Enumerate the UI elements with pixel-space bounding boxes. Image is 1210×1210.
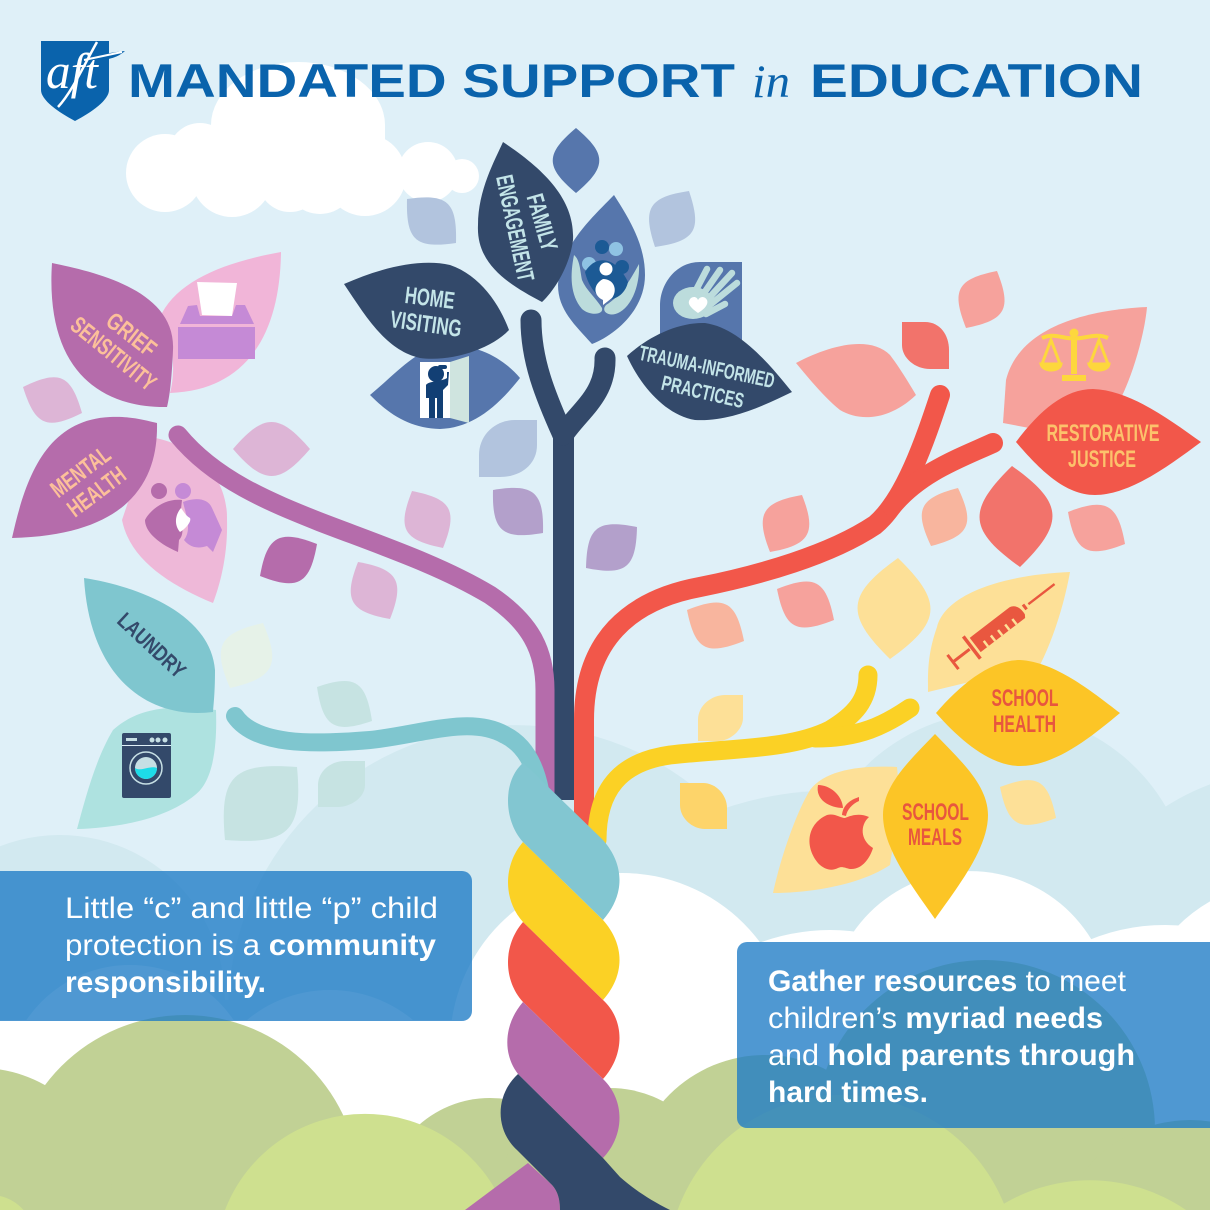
leaf: school meals: MEALS (908, 824, 962, 851)
small leaves: red (687, 271, 1125, 649)
leaf: family engagement: ENGAGEMENT (490, 173, 539, 284)
braided trunk (465, 763, 670, 1210)
title: in (752, 56, 790, 108)
leaf: grief sensitivity: GRIEF (101, 307, 161, 363)
small leaves: teal (221, 623, 372, 841)
leaf: laundry (84, 578, 215, 713)
leaf: school meals (883, 734, 988, 919)
icon: syringe (943, 573, 1063, 674)
leaf: mental health (12, 417, 157, 538)
title (128, 54, 1143, 108)
callout: gather resources (737, 942, 1210, 1128)
icon: two heads in dialogue (145, 483, 222, 552)
branch: navy (531, 320, 605, 800)
callout: community responsibility (0, 871, 472, 1021)
callout: gather resources: children’s myriad needs (768, 1002, 1103, 1035)
branch: yellow (597, 675, 910, 840)
callout: gather resources: Gather resources to meet (768, 965, 1127, 998)
callout: gather resources: hard times. (768, 1076, 928, 1109)
logo: aft (46, 43, 99, 99)
leaf: home visiting: VISITING (388, 306, 463, 343)
leaf: home visiting icon background (370, 345, 520, 429)
leaf: restorative justice (1016, 389, 1201, 495)
panel: yellow leaves (680, 558, 1120, 919)
icon: hand with heart (673, 269, 737, 319)
small leaves: yellow (680, 558, 1056, 829)
small leaves: purple (23, 377, 451, 619)
leaf: school health (936, 660, 1120, 766)
branch: red (584, 395, 993, 820)
background hills: light green (0, 1095, 1186, 1210)
title: MANDATED SUPPORT (128, 54, 735, 107)
branch: purple (178, 435, 545, 800)
callout: gather resources: and hold parents through (768, 1039, 1135, 1072)
leaf: grief sensitivity: SENSITIVITY (65, 312, 161, 397)
leaf: family engagement (478, 142, 573, 302)
leaf: trauma-informed practices (627, 323, 792, 420)
leaf: family engagement: FAMILY (521, 191, 563, 254)
leaf: scales icon background (1003, 307, 1147, 430)
callout: community responsibility: Little “c” and little “p” child (65, 892, 438, 925)
leaf: trauma icon background (660, 262, 742, 340)
panel: red leaves (687, 271, 1201, 649)
background hills: pale blue (0, 712, 1210, 1210)
leaf: home visiting (344, 263, 509, 359)
title: EDUCATION (810, 54, 1143, 107)
leaf: school meals: SCHOOL (902, 799, 969, 826)
leaf: grief sensitivity (51, 263, 173, 407)
icon: apple (810, 785, 873, 870)
background hills: green (0, 960, 1210, 1210)
leaf: apple icon background (773, 767, 900, 893)
leaf: restorative justice: JUSTICE (1068, 446, 1136, 473)
cloud (126, 62, 479, 217)
background hills: white (0, 871, 1210, 1210)
leaf: home visiting: HOME (403, 282, 456, 315)
branch: teal (235, 716, 540, 790)
callout: community responsibility: responsibility. (65, 966, 266, 999)
leaf: laundry: LAUNDRY (112, 608, 191, 683)
leaf: washer icon background (77, 707, 216, 829)
leaf: school health: HEALTH (993, 711, 1056, 738)
leaf: mental health: MENTAL (46, 441, 116, 503)
icon: person at open door (420, 356, 469, 423)
panel: purple leaves (12, 252, 451, 619)
panel: navy leaves (344, 128, 792, 571)
leaf: tissue icon background (162, 252, 281, 393)
leaf: trauma-informed practices: TRAUMA-INFORMED (637, 342, 777, 393)
leaf: restorative justice: RESTORATIVE (1046, 420, 1160, 447)
icon: scales of justice (1041, 330, 1109, 378)
panel: teal leaves (77, 578, 372, 841)
logo (41, 41, 125, 121)
icon: tissue box (178, 282, 255, 359)
leaf: school health: SCHOOL (992, 685, 1058, 712)
leaf: mental health icon background (122, 437, 227, 603)
leaf: trauma-informed practices: PRACTICES (659, 372, 746, 413)
callout: community responsibility: protection is a community (65, 929, 436, 962)
leaf: syringe icon background (928, 572, 1070, 692)
small leaves: navy (407, 128, 695, 571)
leaf: mental health: HEALTH (62, 462, 131, 523)
icon: family in hands (572, 240, 639, 314)
leaf: family icon background (558, 195, 645, 344)
icon: washing machine (122, 733, 171, 798)
